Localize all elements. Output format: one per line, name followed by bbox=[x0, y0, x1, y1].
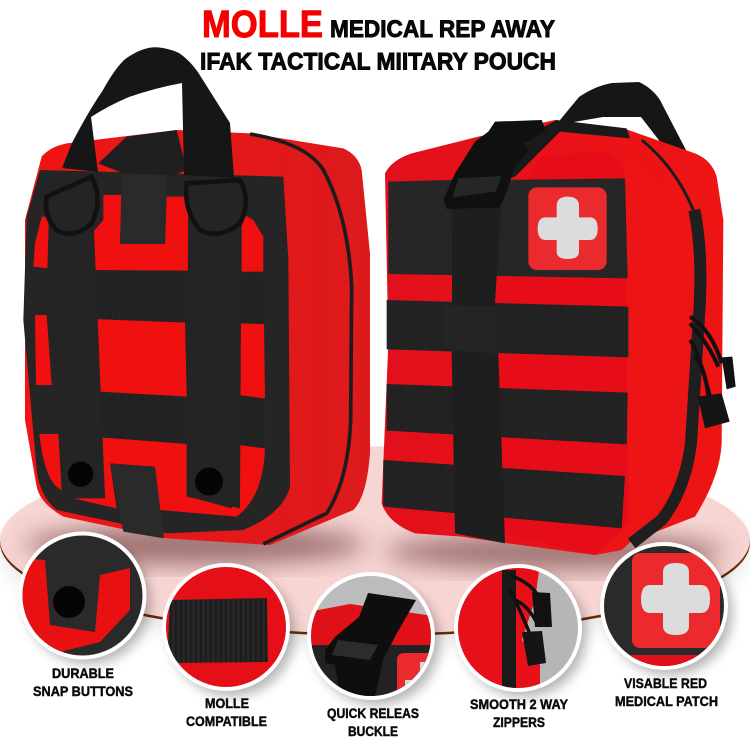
label: smooth 2 way zippers: ZIPPERS bbox=[493, 714, 545, 730]
label: molle compatible: COMPATIBLE bbox=[186, 713, 267, 729]
label: molle compatible bbox=[186, 695, 267, 729]
main vertical strap bbox=[452, 207, 505, 543]
label: durable snap buttons: DURABLE bbox=[52, 665, 114, 681]
detail circle: zippers bbox=[454, 564, 586, 697]
pouch body: right bbox=[382, 120, 723, 555]
zipper: left pouch bbox=[250, 134, 352, 544]
label: smooth 2 way zippers bbox=[470, 696, 569, 730]
bottom tab bbox=[111, 464, 164, 538]
label: visable red medical patch: VISABLE RED bbox=[624, 675, 707, 691]
detail circle: medical patch bbox=[600, 542, 732, 675]
label: molle compatible: MOLLE bbox=[205, 695, 249, 711]
zipper cords bbox=[509, 574, 538, 632]
pouch body: left bbox=[25, 130, 370, 545]
title: MOLLE bbox=[202, 4, 323, 46]
title bbox=[200, 4, 556, 76]
MOLLE webbing bands bbox=[387, 300, 628, 357]
zipper pulls bbox=[690, 317, 736, 428]
detail circle: snap buttons bbox=[18, 532, 150, 664]
snap button bbox=[53, 586, 85, 618]
handle: right pouch bbox=[560, 82, 687, 152]
centre tab top bbox=[120, 173, 167, 244]
webbing bands bbox=[92, 271, 190, 323]
straps: left pouch bbox=[47, 173, 105, 497]
D-rings bbox=[46, 177, 246, 234]
strap loop bbox=[445, 305, 498, 353]
title: IFAK TACTICAL MIITARY POUCH bbox=[200, 48, 556, 76]
buckle bbox=[443, 120, 546, 209]
right pouch: front view bbox=[382, 82, 736, 555]
title: MEDICAL REP AWAY bbox=[330, 16, 555, 43]
patch corner bbox=[397, 653, 428, 690]
label: visable red medical patch bbox=[615, 675, 718, 709]
red cut-outs bbox=[33, 195, 265, 517]
upper strap bbox=[503, 120, 630, 180]
label: quick releas buckle: BUCKLE bbox=[348, 723, 398, 739]
left pouch: back view bbox=[23, 47, 370, 545]
label: quick releas buckle bbox=[327, 705, 419, 739]
platform: pink ellipse bbox=[0, 446, 750, 644]
medical patch bbox=[528, 187, 607, 270]
detail circle: MOLLE webbing bbox=[162, 563, 294, 696]
webbing band bbox=[167, 598, 268, 663]
back panel: black webbing frame bbox=[23, 170, 290, 533]
label: durable snap buttons bbox=[33, 665, 133, 699]
label: smooth 2 way zippers: SMOOTH 2 WAY bbox=[470, 696, 569, 712]
label: visable red medical patch: MEDICAL PATCH bbox=[615, 693, 718, 709]
detail circle: buckle bbox=[307, 572, 439, 705]
loop panel bbox=[388, 178, 628, 278]
zipper: right pouch bbox=[642, 140, 693, 210]
handle: left pouch bbox=[62, 47, 234, 178]
label: quick releas buckle: QUICK RELEAS bbox=[327, 705, 419, 721]
snap buttons bbox=[68, 462, 93, 487]
buckle bbox=[325, 593, 416, 696]
cross bbox=[641, 563, 710, 635]
cross bbox=[538, 197, 598, 259]
label: durable snap buttons: SNAP BUTTONS bbox=[33, 683, 133, 699]
